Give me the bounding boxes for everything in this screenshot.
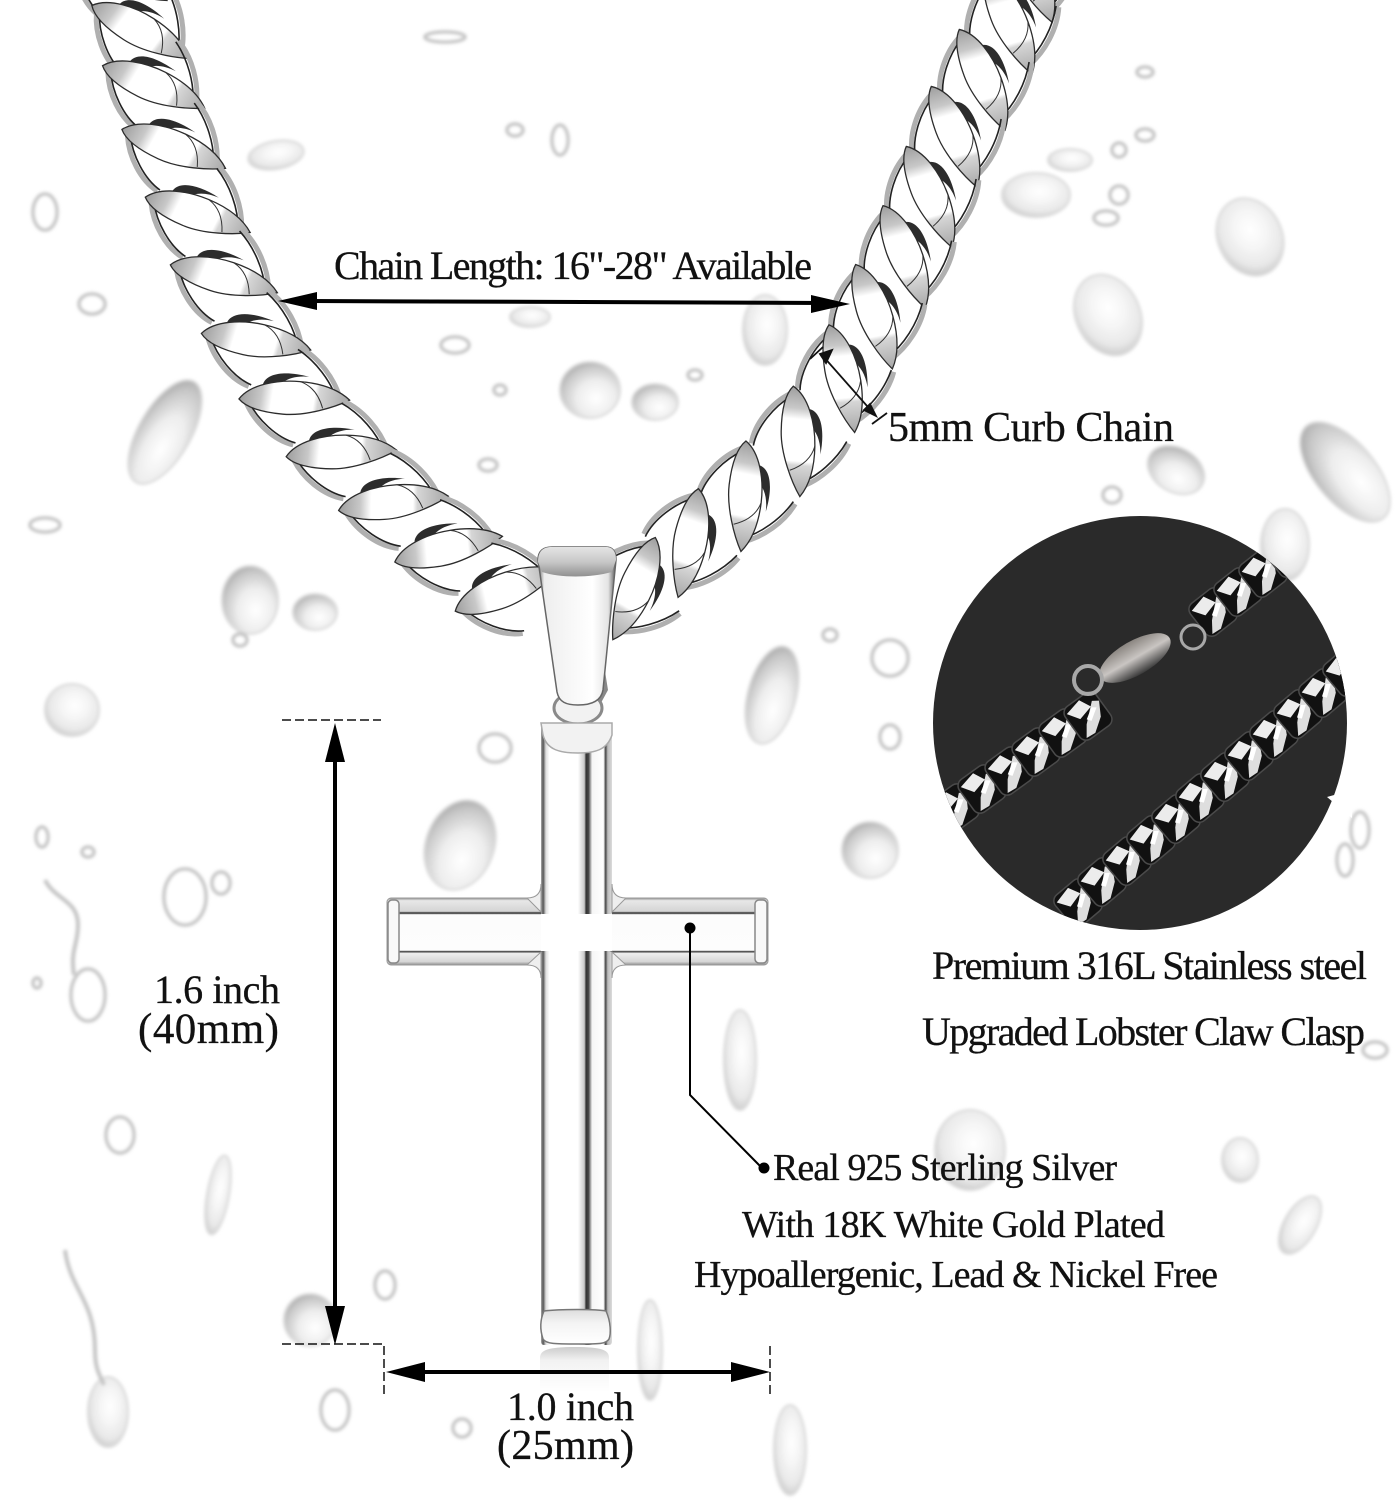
millimetres: (25mm) bbox=[497, 1423, 634, 1469]
line one: Real 925 Sterling Silver bbox=[773, 1147, 1117, 1189]
upper vertical bar bbox=[541, 723, 612, 914]
cross pendant bbox=[387, 723, 768, 1392]
bar end caps bbox=[388, 900, 399, 963]
circular inset: chain clasp bbox=[928, 516, 1374, 931]
label: curb chain: 5mm Curb Chain bbox=[888, 405, 1174, 451]
line three: Hypoallergenic, Lead & Nickel Free bbox=[694, 1254, 1218, 1296]
height label bbox=[138, 967, 280, 1053]
lower vertical bar bbox=[541, 951, 612, 1345]
inset notch bbox=[1327, 790, 1352, 818]
material text bbox=[694, 1147, 1218, 1296]
chain width marker bbox=[810, 347, 887, 424]
heading: chain length: Chain Length: 16"-28" Available bbox=[334, 243, 812, 288]
inches: 1.0 inch bbox=[507, 1384, 634, 1429]
junction fillets bbox=[527, 884, 626, 978]
bottom cap bbox=[541, 1310, 610, 1344]
inset chains bbox=[928, 526, 1374, 931]
width dimension arrow bbox=[384, 1346, 770, 1396]
inches: 1.6 inch bbox=[154, 967, 280, 1012]
line two: With 18K White Gold Plated bbox=[742, 1204, 1165, 1246]
chain: right strand bbox=[587, 0, 1084, 641]
width label bbox=[497, 1384, 634, 1469]
water trails bbox=[45, 880, 78, 975]
top cap bbox=[541, 723, 612, 753]
crossing highlight bbox=[541, 914, 612, 951]
millimetres: (40mm) bbox=[138, 1006, 279, 1053]
chain: white backing bbox=[120, 0, 1030, 590]
reflection bbox=[540, 1347, 609, 1392]
chain length arrow bbox=[278, 292, 850, 313]
chain: left strand bbox=[70, 0, 559, 645]
label: stainless steel: Premium 316L Stainless steel bbox=[932, 943, 1367, 988]
lobster clasp bbox=[1092, 623, 1178, 693]
pendant bail bbox=[538, 547, 616, 724]
material callout leader bbox=[684, 922, 770, 1174]
height dimension arrow bbox=[282, 720, 384, 1345]
label: clasp: Upgraded Lobster Claw Clasp bbox=[922, 1009, 1365, 1054]
horizontal bar bbox=[387, 898, 768, 965]
